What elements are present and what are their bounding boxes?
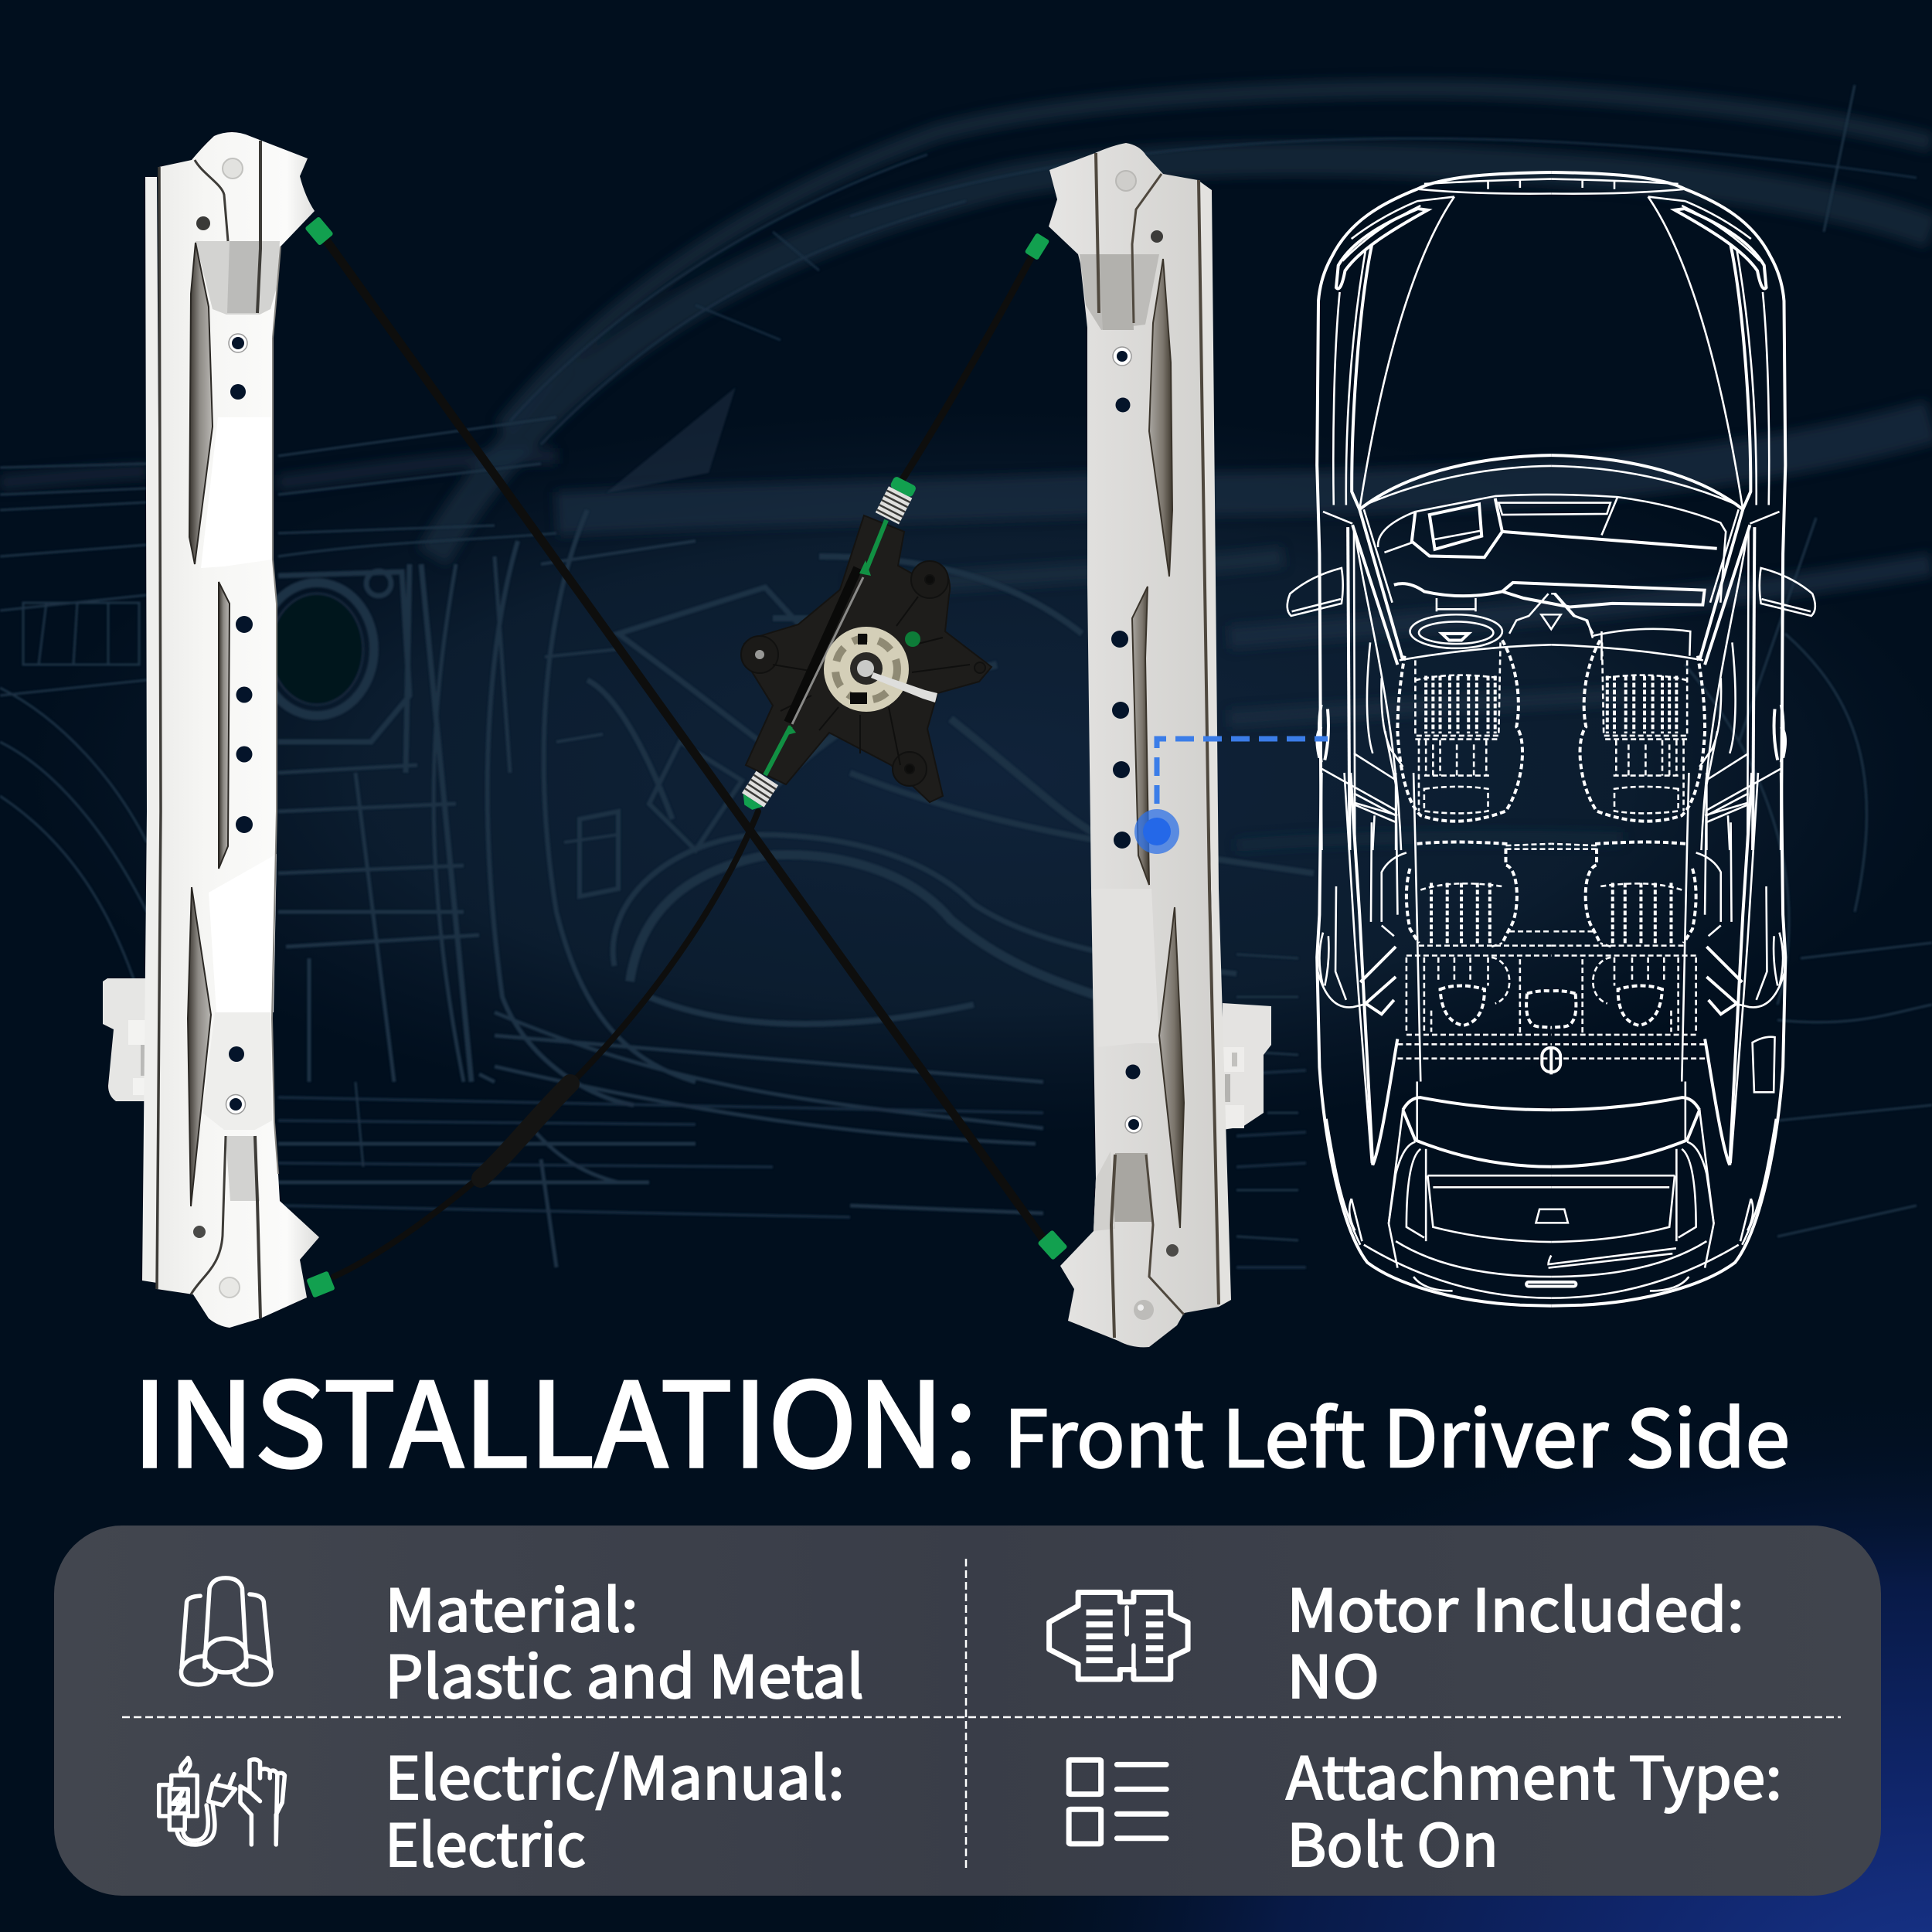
left rail holes: [193, 158, 253, 1298]
title: [132, 1332, 1790, 1501]
left rail body: [157, 132, 319, 1328]
car wireframe top view: [1287, 172, 1815, 1306]
upper cable to actuator: [899, 257, 1032, 485]
text: attachment type: [1286, 1731, 1782, 1883]
left rail clip: [103, 978, 159, 1101]
text: attachment type: Attachment Type:: [1286, 1731, 1782, 1816]
cables: [327, 241, 1045, 1277]
icon: material tubes: [181, 1578, 271, 1685]
wire and green guides: [788, 568, 858, 723]
text: material: Plastic and Metal: [385, 1630, 864, 1715]
icon: motor: [1049, 1593, 1188, 1679]
lower curved cable with sleeve: [334, 811, 758, 1277]
text: electric manual: [385, 1731, 845, 1883]
green cable end caps: [304, 216, 1068, 1298]
icon: attachment list: [1069, 1760, 1166, 1844]
text: electric manual: Electric/Manual:: [385, 1731, 845, 1816]
left rail: [103, 132, 319, 1328]
right rail slots: [1132, 259, 1184, 1228]
spec panel: [54, 1526, 1881, 1896]
right rail clip: [1213, 1003, 1271, 1130]
blue location dot: [1134, 809, 1179, 854]
subtitle: Front Left Driver Side: [1004, 1377, 1790, 1490]
text: electric manual: Electric: [385, 1798, 586, 1883]
car dashboard and console: [1378, 495, 1726, 660]
blue connector line: [1134, 739, 1328, 854]
background car door sketch: [0, 85, 1932, 1267]
right rail: [1049, 143, 1271, 1347]
icon: electric and manual: [159, 1758, 284, 1845]
spool disc: [824, 627, 909, 712]
title: INSTALLATION:: [132, 1332, 978, 1501]
text: motor included: NO: [1287, 1630, 1379, 1715]
text: material: [385, 1563, 864, 1715]
text: motor included: Motor Included:: [1287, 1563, 1744, 1648]
car rear details: [1526, 1037, 1775, 1286]
car front half: [1287, 172, 1551, 850]
text: material: Material:: [385, 1563, 638, 1648]
car rear half: [1317, 773, 1551, 1306]
actuator arm: [871, 672, 937, 702]
actuator knobs: [741, 561, 985, 786]
rear seat: [1406, 842, 1517, 943]
text: attachment type: Bolt On: [1287, 1798, 1498, 1883]
left rail slots: [188, 243, 230, 1206]
long diagonal cable: [327, 241, 1045, 1241]
right rail holes: [1111, 171, 1179, 1320]
right rail body: [1049, 143, 1219, 1347]
text: motor included: [1287, 1563, 1744, 1715]
seat: [1397, 641, 1522, 821]
actuator plate: [737, 475, 992, 815]
springs: [876, 475, 918, 525]
